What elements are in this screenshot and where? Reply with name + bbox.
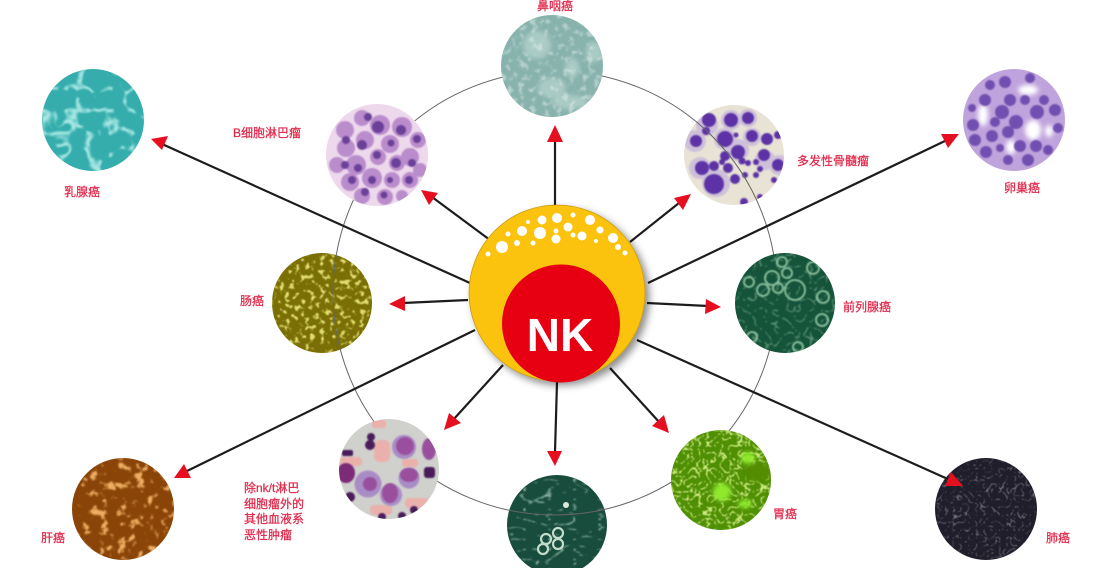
label: B-cell lymphoma: B细胞淋巴瘤 (233, 125, 301, 140)
cell image: prostate cancer (735, 253, 835, 353)
cell image: other blood malignancies (337, 419, 439, 521)
red nucleus (502, 264, 620, 382)
label: ovarian cancer: 卵巢癌 (1004, 180, 1040, 195)
NK label: NK (527, 309, 593, 361)
white dots (486, 212, 628, 256)
arrow: to intestinal cancer (389, 296, 468, 311)
ring connecting the cancer images (333, 71, 777, 515)
label: prostate cancer: 前列腺癌 (843, 299, 891, 314)
label: other blood malignancies: 其他血液系 (244, 511, 304, 526)
central NK cell (469, 205, 645, 382)
arrow: to breast cancer (151, 136, 470, 283)
arrow: to stomach cancer (610, 368, 669, 433)
yellow outer cell (469, 205, 645, 381)
arrow: to prostate cancer (647, 299, 721, 314)
label: stomach cancer: 胃癌 (773, 506, 797, 521)
arrow: to B-cell lymphoma (421, 190, 490, 240)
cell image: bottom dark green culture (507, 475, 607, 568)
cell image: breast cancer (42, 69, 144, 171)
label: liver cancer: 肝癌 (41, 530, 65, 545)
cell image: liver cancer (72, 458, 174, 560)
label: lung cancer: 肺癌 (1046, 530, 1070, 545)
arrow: to liver cancer (174, 330, 475, 478)
arrow: to nasopharyngeal cancer (547, 125, 563, 205)
cell image: stomach cancer (671, 430, 772, 530)
arrow: to other blood malignancies (444, 365, 503, 430)
cell image: intestinal cancer (272, 253, 372, 353)
arrow: to lung cancer (637, 340, 963, 486)
arrow: to bottom image (547, 382, 562, 466)
arrow: to multiple myeloma (630, 194, 691, 242)
label: intestinal cancer: 肠癌 (240, 293, 264, 308)
arrow: to ovarian cancer (648, 134, 959, 283)
cell image: ovarian cancer (963, 69, 1065, 171)
cell image: lung cancer (935, 458, 1037, 560)
label: other blood malignancies: 恶性肿瘤 (244, 527, 292, 542)
label: other blood malignancies: 细胞瘤外的 (244, 496, 304, 511)
cell image: multiple myeloma (684, 105, 789, 206)
label: breast cancer: 乳腺癌 (64, 184, 100, 199)
cell image: B-cell lymphoma (326, 104, 428, 206)
label: other blood malignancies: 除nk/t淋巴 (244, 480, 299, 495)
cell image: nasopharyngeal cancer (501, 15, 603, 117)
label: multiple myeloma: 多发性骨髓瘤 (797, 153, 869, 168)
